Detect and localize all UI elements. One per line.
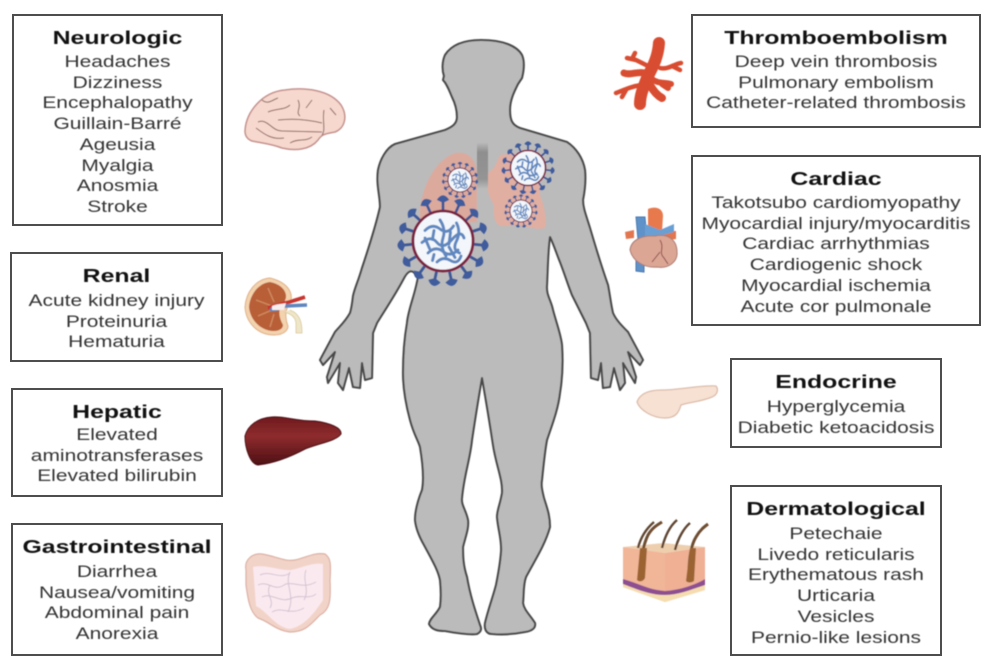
text block: dermatological conditions: Pernio-like lesions xyxy=(751,629,921,647)
text block: neurologic symptoms: Myalgia xyxy=(81,157,154,175)
text block: gastrointestinal symptoms: Abdominal pain xyxy=(45,604,189,622)
text block: cardiac conditions: Acute cor pulmonale xyxy=(740,298,932,316)
right lung xyxy=(487,153,546,229)
text block: dermatological conditions: Urticaria xyxy=(797,587,875,605)
panel: Cardiac xyxy=(691,155,981,326)
text block: gastrointestinal symptoms: Nausea/vomiting xyxy=(39,584,195,602)
trachea xyxy=(477,143,488,188)
left lung xyxy=(420,153,477,225)
text block: endocrine conditions: Hyperglycemia xyxy=(767,398,905,416)
text block: cardiac conditions: Myocardial injury/myocarditis xyxy=(701,215,971,233)
heading: Cardiac: Cardiac xyxy=(790,169,882,189)
text block: renal symptoms: Proteinuria xyxy=(66,313,167,331)
panel: Dermatological xyxy=(730,485,942,656)
text block: dermatological conditions xyxy=(748,525,924,647)
text block: dermatological conditions: Livedo reticularis xyxy=(757,546,915,564)
panel: Renal xyxy=(10,252,223,362)
text block: endocrine conditions xyxy=(738,398,934,437)
panel: Endocrine xyxy=(730,358,942,448)
text block: dermatological conditions: Petechaie xyxy=(789,525,883,543)
heading: Dermatological: Dermatological xyxy=(746,499,926,519)
heading: Neurologic: Neurologic xyxy=(53,28,182,48)
icon: heart xyxy=(625,208,677,272)
icon: intestines xyxy=(246,554,330,632)
text block: renal symptoms: Acute kidney injury xyxy=(29,292,204,310)
text block: hepatic symptoms: Elevated bilirubin xyxy=(37,467,197,485)
text block: cardiac conditions: Cardiogenic shock xyxy=(750,256,922,274)
text block: gastrointestinal symptoms xyxy=(39,563,195,643)
text block: hepatic symptoms xyxy=(30,426,204,485)
icon: blood vessel xyxy=(616,43,681,104)
panel: Thromboembolism xyxy=(691,14,981,128)
text block: cardiac conditions: Myocardial ischemia xyxy=(741,277,931,295)
text block: thromboembolism conditions: Pulmonary embolism xyxy=(738,74,934,92)
text block: hepatic symptoms: Elevated xyxy=(76,426,158,444)
virus: upper right lung xyxy=(502,142,554,194)
text block: renal symptoms: Hematuria xyxy=(68,333,165,351)
lungs with virus particles xyxy=(398,142,554,286)
text block: cardiac conditions: Cardiac arrhythmias xyxy=(742,235,930,253)
text block: cardiac conditions xyxy=(701,194,971,316)
heading: Gastrointestinal: Gastrointestinal xyxy=(22,537,212,557)
text block: neurologic symptoms: Headaches xyxy=(64,53,171,71)
virus: large xyxy=(398,196,488,286)
text block: cardiac conditions: Takotsubo cardiomyopathy xyxy=(711,194,961,212)
text block: thromboembolism conditions: Catheter-related thrombosis xyxy=(706,94,966,112)
icon: kidney xyxy=(245,278,307,335)
text block: neurologic symptoms xyxy=(42,53,193,216)
icon: skin cross-section xyxy=(623,520,708,602)
heading: Endocrine: Endocrine xyxy=(775,372,897,392)
text block: neurologic symptoms: Stroke xyxy=(87,198,148,216)
text block: dermatological conditions: Vesicles xyxy=(798,608,874,626)
human body silhouette xyxy=(320,40,643,634)
text block: hepatic symptoms: aminotransferases xyxy=(31,447,203,465)
text block: neurologic symptoms: Ageusia xyxy=(80,136,155,154)
text block: dermatological conditions: Erythematous rash xyxy=(748,566,924,584)
text block: neurologic symptoms: Encephalopathy xyxy=(42,94,193,112)
virus: lower right lung xyxy=(504,194,538,228)
text block: gastrointestinal symptoms: Anorexia xyxy=(76,625,158,643)
panel: Neurologic xyxy=(12,14,223,226)
icon: brain xyxy=(245,89,345,149)
text block: endocrine conditions: Diabetic ketoacidosis xyxy=(738,419,934,437)
text block: renal symptoms xyxy=(28,292,205,351)
text block: neurologic symptoms: Anosmia xyxy=(77,177,158,195)
text block: neurologic symptoms: Dizziness xyxy=(73,74,162,92)
text block: thromboembolism conditions xyxy=(706,53,966,112)
icon: liver xyxy=(245,417,341,465)
panel: Hepatic xyxy=(11,388,223,497)
panel: Gastrointestinal xyxy=(11,523,223,656)
heading: Hepatic: Hepatic xyxy=(72,402,162,422)
virus: small left lung xyxy=(442,162,478,198)
icon: pancreas xyxy=(637,386,717,418)
text block: thromboembolism conditions: Deep vein thrombosis xyxy=(735,53,937,71)
text block: gastrointestinal symptoms: Diarrhea xyxy=(77,563,157,581)
heading: Thromboembolism: Thromboembolism xyxy=(724,28,948,48)
heading: Renal: Renal xyxy=(83,266,150,286)
text block: neurologic symptoms: Guillain-Barré xyxy=(53,115,182,133)
